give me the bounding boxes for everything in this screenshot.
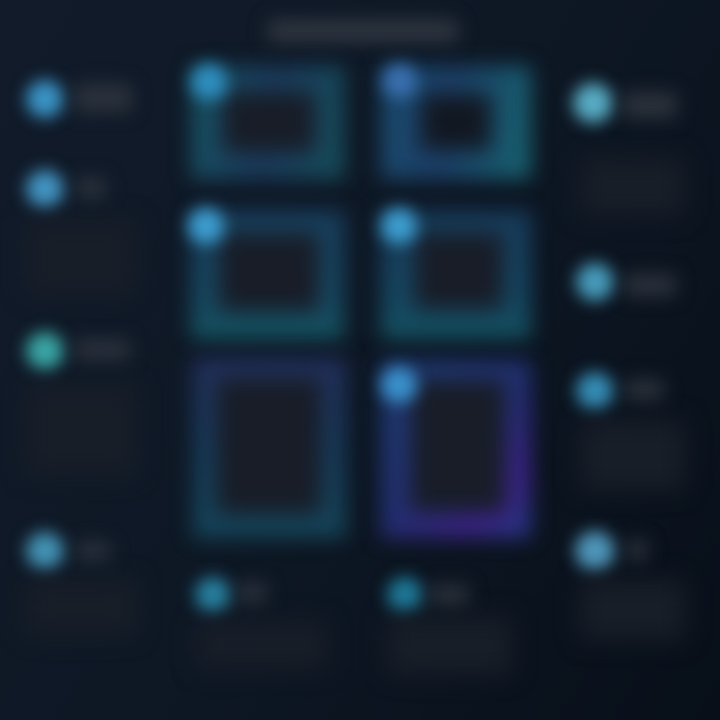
heading: bottom item 2 xyxy=(429,585,469,605)
icon: left item 4 xyxy=(26,532,64,570)
icon: left item 1 xyxy=(26,80,64,118)
panel: card 3 xyxy=(176,196,354,349)
icon: right item 2 xyxy=(576,263,614,301)
panel: card 4 xyxy=(368,196,542,350)
icon: badge 5 xyxy=(381,367,417,403)
text block: bottom item 1 xyxy=(197,621,327,669)
heading: left item 2 xyxy=(76,178,106,198)
card frame xyxy=(193,358,346,538)
panel: card 6 xyxy=(367,349,544,552)
heading: right item 2 xyxy=(624,274,676,296)
icon: badge 1 xyxy=(191,64,227,100)
heading: right item 1 xyxy=(622,92,677,118)
icon: bottom badge 1 xyxy=(195,577,231,613)
panel: bottom item 1 xyxy=(185,567,318,662)
icon: badge 2 xyxy=(383,64,417,98)
heading: right item 3 xyxy=(624,380,664,400)
card interior xyxy=(217,378,321,514)
text block: right item 3 xyxy=(580,420,685,490)
card interior xyxy=(223,92,315,152)
card frame xyxy=(191,211,344,339)
card interior xyxy=(219,233,319,311)
heading: left item 3 xyxy=(74,340,130,360)
panel: right column xyxy=(562,72,683,638)
icon: badge 3 xyxy=(188,208,224,244)
icon: bottom badge 2 xyxy=(387,577,423,613)
heading: right item 4 xyxy=(626,540,648,560)
card frame xyxy=(381,211,531,339)
icon: right item 4 xyxy=(575,531,615,571)
card frame xyxy=(191,66,344,179)
icon: left item 3 xyxy=(26,332,64,370)
card interior xyxy=(415,233,503,309)
icon: right item 3 xyxy=(576,372,614,410)
heading: left item 1 xyxy=(74,84,132,112)
title xyxy=(268,20,458,42)
card frame xyxy=(381,66,531,179)
icon: right item 1 xyxy=(573,83,613,123)
panel: bottom item 2 xyxy=(378,568,509,672)
panel: left column xyxy=(16,70,134,623)
text block: bottom item 2 xyxy=(387,617,512,675)
text block: right item 1 xyxy=(580,158,685,216)
text block: right item 4 xyxy=(580,580,685,640)
card interior xyxy=(421,94,491,150)
heading: bottom item 1 xyxy=(237,583,267,603)
text block: left item 2 xyxy=(26,220,136,295)
card frame xyxy=(381,360,531,538)
icon: badge 4 xyxy=(381,208,417,244)
text block: left item 4 xyxy=(26,580,136,635)
icon: left item 2 xyxy=(26,170,64,208)
text block: left item 3 xyxy=(26,385,136,475)
card interior xyxy=(411,380,505,512)
panel: card 1 xyxy=(178,52,354,189)
heading: left item 4 xyxy=(76,542,110,560)
panel: card 5 xyxy=(183,350,356,548)
panel: card 2 xyxy=(368,52,543,191)
